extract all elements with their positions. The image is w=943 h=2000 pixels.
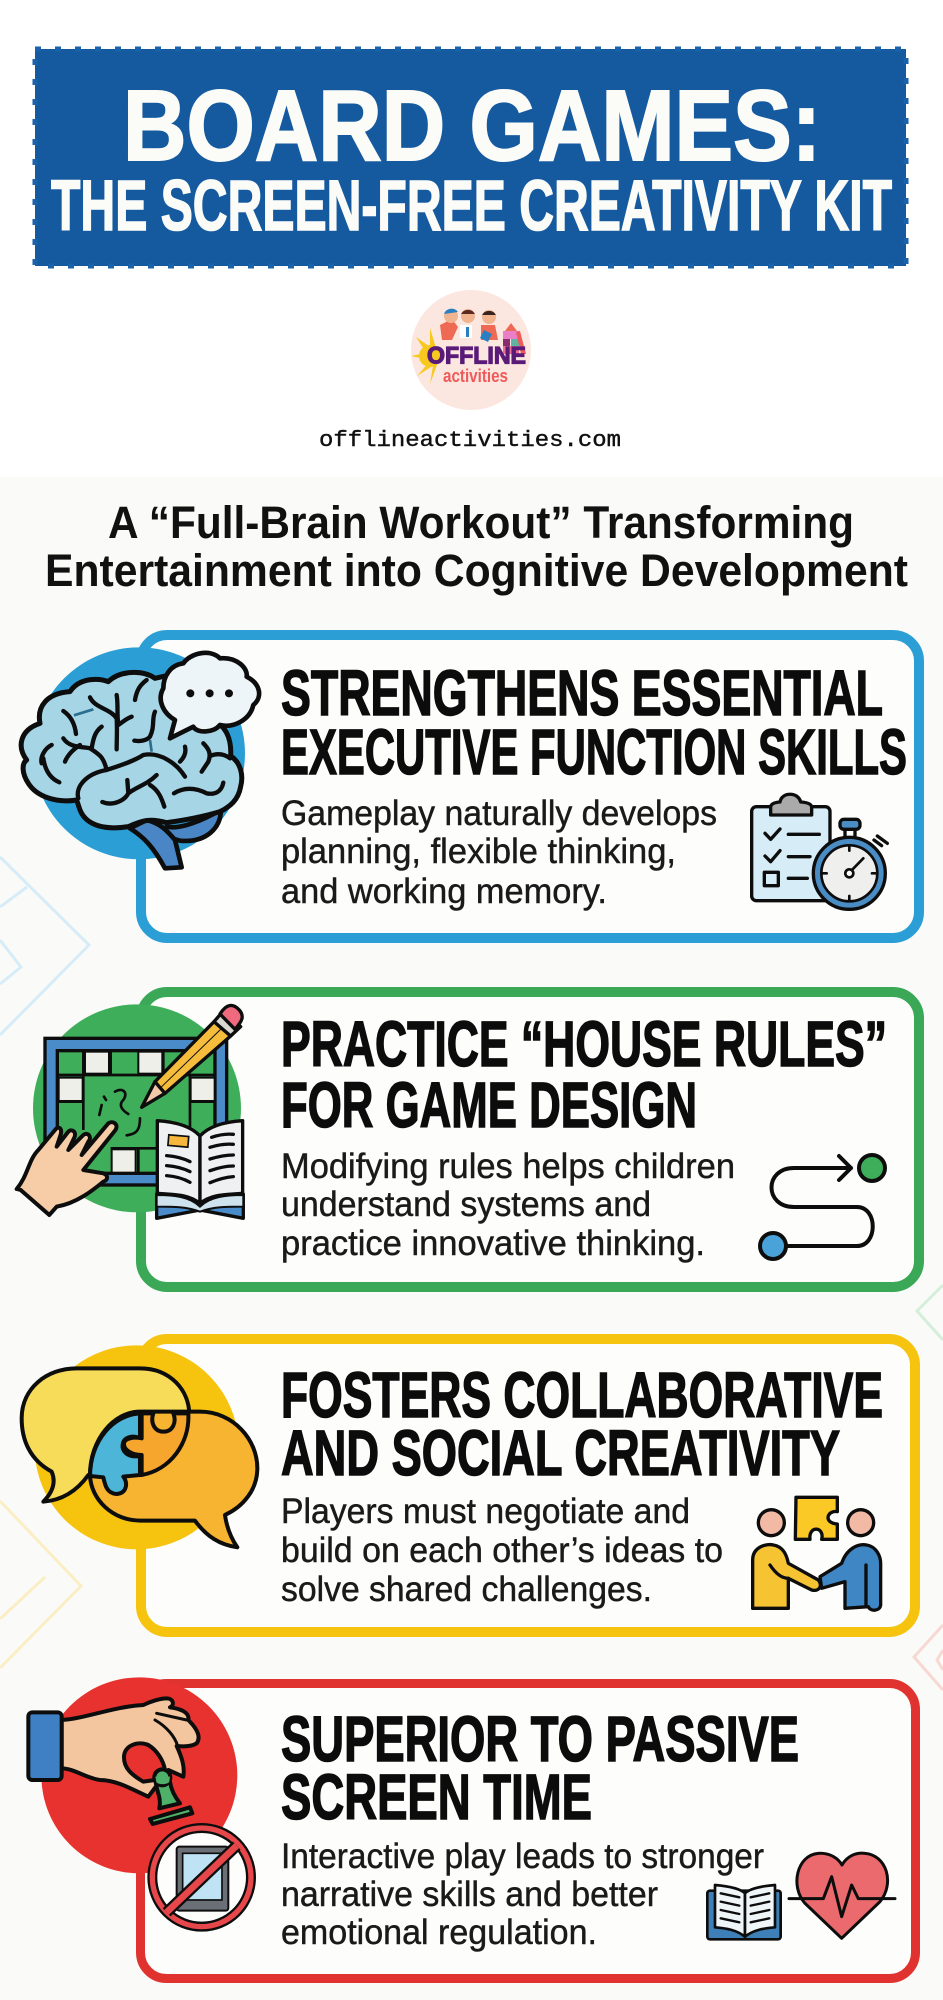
card frame — [141, 635, 919, 938]
logo subtitle: activities — [443, 366, 508, 386]
icon: people shaking hands with puzzle piece — [753, 1497, 881, 1610]
card frame — [141, 992, 919, 1287]
icon: speech bubbles with puzzle — [22, 1345, 257, 1549]
icon: open book and heartbeat — [707, 1853, 895, 1939]
logo wordmark: OFFLINE — [427, 342, 526, 370]
icon: winding path with arrow — [760, 1155, 885, 1259]
card frame — [140, 1684, 916, 1978]
card body text: Players must negotiate and — [281, 1492, 690, 1531]
icon: game board, pencil, hand, rule book — [17, 1004, 243, 1218]
card heading — [281, 1008, 887, 1141]
panel: house rules — [17, 992, 919, 1287]
logo: offline activities — [411, 290, 531, 410]
title banner — [35, 49, 906, 266]
card frame — [141, 1339, 915, 1632]
card body text — [281, 794, 717, 911]
card heading — [281, 657, 907, 788]
panel: superior to passive screen time — [28, 1677, 915, 1978]
card body text: and working memory. — [281, 872, 607, 911]
section heading: A “Full-Brain Workout” Transforming — [108, 497, 854, 548]
website url: offlineactivities.com — [319, 428, 621, 453]
card body text: Modifying rules helps children — [281, 1147, 735, 1186]
card body text — [281, 1147, 735, 1263]
card body text — [281, 1837, 764, 1952]
panel: collaborative creativity — [22, 1339, 915, 1632]
card body text: understand systems and — [281, 1185, 651, 1224]
card body text: solve shared challenges. — [281, 1570, 652, 1609]
card body text: practice innovative thinking. — [281, 1224, 705, 1263]
title line 1: BOARD GAMES: — [123, 70, 821, 182]
section heading: Entertainment into Cognitive Development — [45, 545, 908, 596]
card heading: FOR GAME DESIGN — [281, 1069, 697, 1141]
panel: executive function skills — [21, 635, 919, 938]
icon: brain with thought bubble — [21, 647, 259, 868]
card body text: narrative skills and better — [281, 1875, 658, 1914]
card body text: Interactive play leads to stronger — [281, 1837, 764, 1876]
card body text: Gameplay naturally develops — [281, 794, 717, 833]
card body text: planning, flexible thinking, — [281, 832, 676, 871]
card heading — [281, 1359, 883, 1489]
card body text: build on each other’s ideas to — [281, 1531, 723, 1570]
section heading — [45, 497, 908, 596]
card body text — [281, 1492, 723, 1609]
icon: hand moving game pawn and no-tablet sign — [28, 1677, 253, 1929]
card heading — [281, 1703, 799, 1833]
icon: clipboard and stopwatch — [752, 794, 887, 909]
card body text: emotional regulation. — [281, 1913, 597, 1952]
card heading: SCREEN TIME — [281, 1761, 592, 1833]
